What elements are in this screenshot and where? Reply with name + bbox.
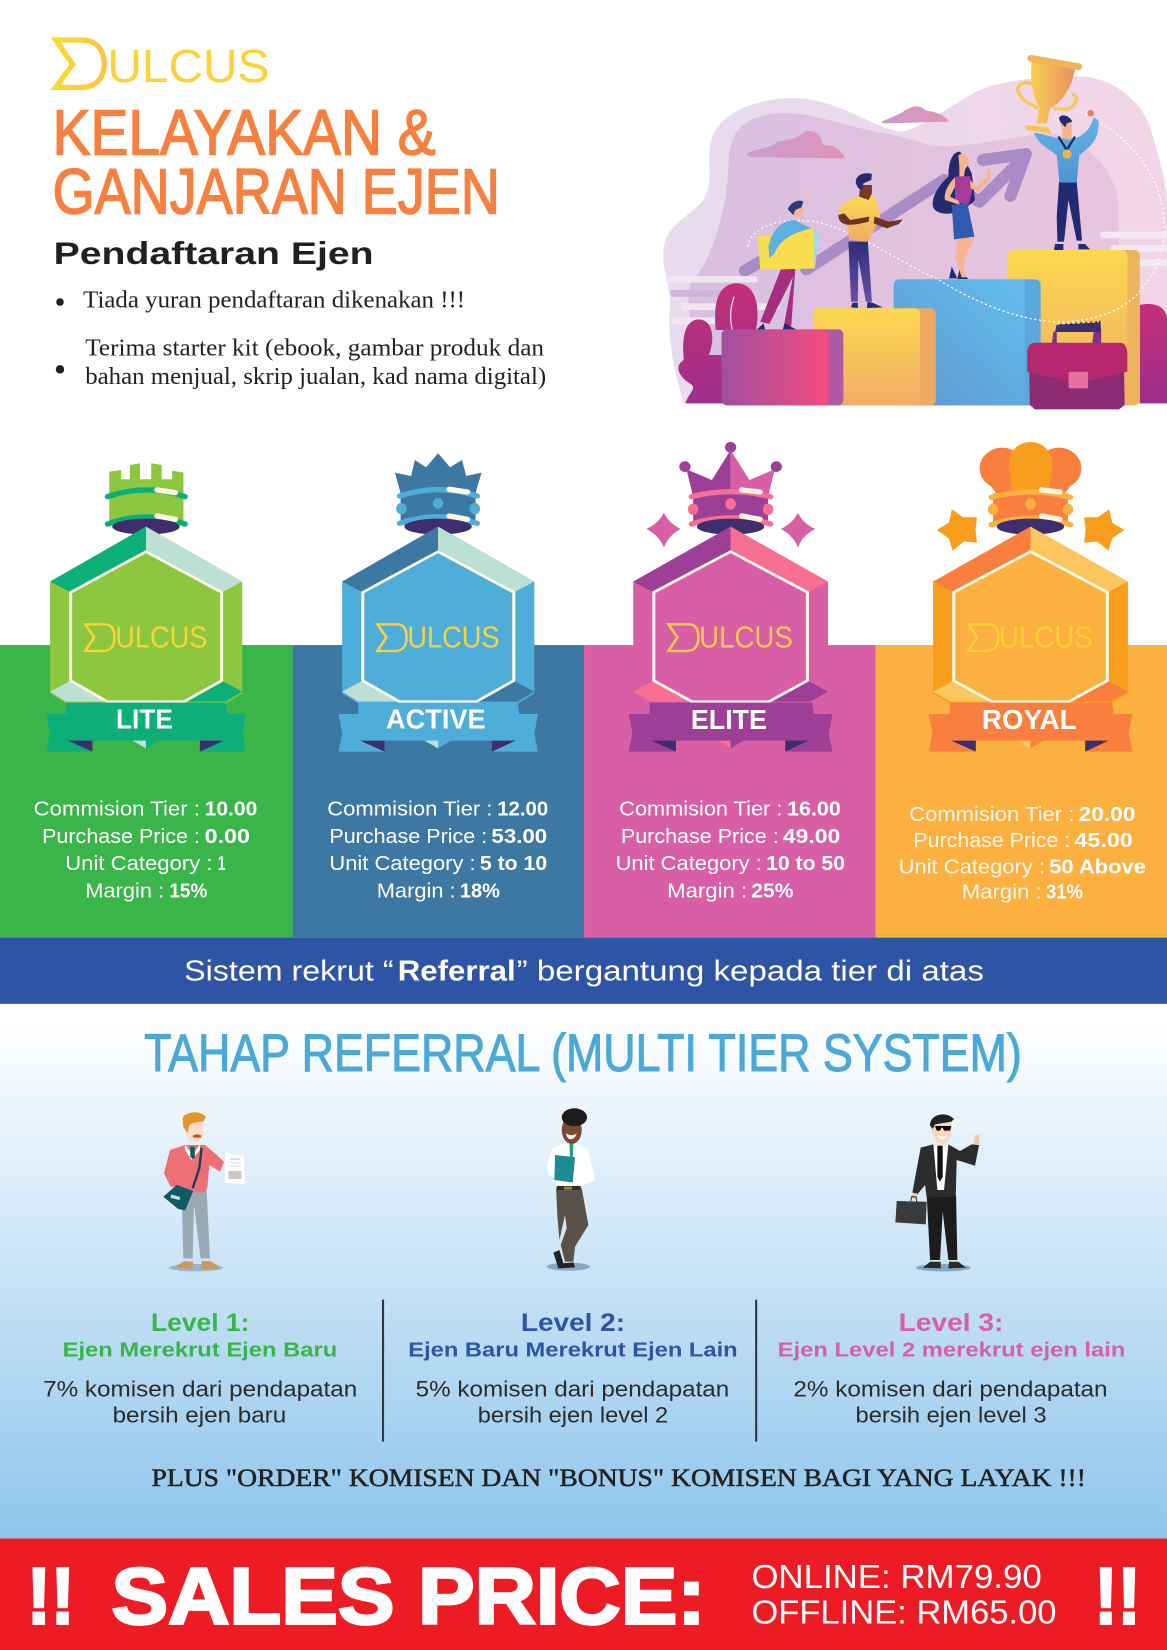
stats: elite: 10 to 50: [766, 853, 845, 875]
stats: royal: Purchase Price :: [913, 830, 1070, 852]
illustration: people climbing podium steps: [663, 58, 1167, 409]
badge: royal: ULCUS: [999, 619, 1093, 654]
column: level 3: 2% komisen dari pendapatan: [793, 1376, 1108, 1401]
registration bullet list: [56, 286, 546, 390]
panel: lite: [0, 645, 293, 938]
stats: elite: 49.00: [783, 826, 840, 848]
character: level 3 agent: [895, 1114, 979, 1271]
column: level 3: Ejen Level 2 merekrut ejen lain: [778, 1339, 1125, 1361]
column: level 2: Ejen Baru Merekrut Ejen Lain: [408, 1339, 738, 1361]
registration bullet list: Tiada yuran pendaftaran dikenakan !!!: [83, 286, 465, 313]
sales price bar: SALES PRICE:: [112, 1552, 706, 1641]
badge: elite: ELITE: [691, 705, 767, 736]
badge: royal: [929, 442, 1132, 752]
referral section background: [0, 1004, 1167, 1538]
column: level 2: Level 2:: [521, 1309, 625, 1337]
column: level 1: [43, 1309, 357, 1428]
stats: elite: Margin :: [667, 881, 747, 903]
panel: elite: [584, 645, 876, 938]
title: GANJARAN EJEN: [53, 156, 500, 228]
badge: royal: ROYAL: [982, 705, 1077, 736]
stats: active: Margin :: [377, 881, 456, 903]
stats: lite: 1: [218, 853, 225, 875]
stats: active: 53.00: [491, 826, 547, 848]
stats: active: Purchase Price :: [329, 826, 487, 848]
stats: active: [327, 799, 548, 903]
stats: lite: [34, 799, 257, 903]
column: level 1: 7% komisen dari pendapatan: [43, 1376, 357, 1401]
referral banner: ” bergantung kepada tier di atas: [517, 956, 984, 988]
column: level 2: [408, 1309, 738, 1428]
referral banner: [0, 938, 1167, 1004]
badge: elite: ULCUS: [699, 619, 793, 654]
registration bullet list: Terima starter kit (ebook, gambar produk dan: [85, 335, 544, 362]
heading: multi tier system: TAHAP REFERRAL (MULTI TIER SYSTEM): [144, 1024, 1022, 1083]
stats: elite: 25%: [751, 881, 794, 903]
stats: lite: 15%: [169, 881, 208, 903]
title: [53, 97, 500, 228]
stats: lite: Margin :: [85, 881, 164, 903]
badge: lite: ULCUS: [115, 619, 207, 654]
character: level 1 agent: [163, 1112, 245, 1271]
sales price bar: [0, 1538, 1167, 1650]
badge: lite: [46, 463, 246, 752]
panel: royal: [876, 645, 1167, 938]
badge: active: ACTIVE: [386, 704, 486, 735]
sales price bar: ONLINE: RM79.90: [751, 1559, 1042, 1596]
column: level 3: [778, 1309, 1125, 1428]
stats: elite: Unit Category :: [616, 853, 762, 875]
sales price bar: OFFLINE: RM65.00: [751, 1595, 1057, 1632]
stats: active: 12.00: [497, 799, 548, 821]
column: level 2: 5% komisen dari pendapatan: [416, 1376, 729, 1401]
character: level 2 agent: [547, 1108, 595, 1271]
badge: active: [338, 453, 538, 752]
stats: active: 18%: [460, 881, 500, 903]
stats: lite: 0.00: [205, 826, 250, 848]
column: level 3: Level 3:: [899, 1309, 1003, 1337]
stats: lite: 10.00: [205, 799, 257, 821]
column: level 3: bersih ejen level 3: [856, 1403, 1047, 1428]
stats: royal: [899, 804, 1146, 904]
stats: royal: 20.00: [1079, 804, 1135, 826]
stats: royal: Unit Category :: [899, 856, 1045, 878]
stats: elite: Purchase Price :: [621, 826, 779, 848]
stats: royal: Commision Tier :: [909, 804, 1074, 826]
stats: lite: Commision Tier :: [34, 799, 200, 821]
bonus note: PLUS "ORDER" KOMISEN DAN "BONUS" KOMISEN BAGI YANG LAYAK !!!: [152, 1464, 1086, 1492]
stats: active: Commision Tier :: [327, 799, 492, 821]
stats: royal: Margin :: [962, 882, 1042, 904]
stats: royal: 50 Above: [1049, 856, 1146, 878]
stats: lite: Purchase Price :: [42, 826, 200, 848]
sales price bar: !!: [1094, 1552, 1141, 1641]
column: level 1: Level 1:: [151, 1309, 249, 1337]
badge: elite: [629, 442, 833, 752]
stats: elite: Commision Tier :: [619, 799, 782, 821]
column: level 2: bersih ejen level 2: [478, 1403, 668, 1428]
stats: lite: Unit Category :: [65, 853, 213, 875]
sales price bar: !!: [27, 1552, 75, 1641]
stats: royal: 31%: [1046, 882, 1083, 904]
stats: elite: 16.00: [787, 799, 841, 821]
stats: elite: [616, 799, 845, 903]
badge: lite: LITE: [116, 704, 173, 735]
brand logo: ULCUS: [107, 40, 269, 92]
stats: royal: 45.00: [1074, 830, 1133, 852]
stats: active: Unit Category :: [329, 853, 476, 875]
referral banner: Referral: [398, 956, 516, 988]
column: level 1: Ejen Merekrut Ejen Baru: [63, 1339, 337, 1361]
badge: active: ULCUS: [407, 619, 500, 654]
title: KELAYAKAN &: [53, 97, 436, 169]
referral banner: Sistem rekrut “: [184, 956, 394, 988]
stats: active: 5 to 10: [480, 853, 547, 875]
column: level 1: bersih ejen baru: [113, 1403, 286, 1428]
registration bullet list: bahan menjual, skrip jualan, kad nama digital): [85, 363, 546, 390]
panel: active: [293, 645, 584, 938]
heading: agent registration: Pendaftaran Ejen: [54, 235, 374, 271]
